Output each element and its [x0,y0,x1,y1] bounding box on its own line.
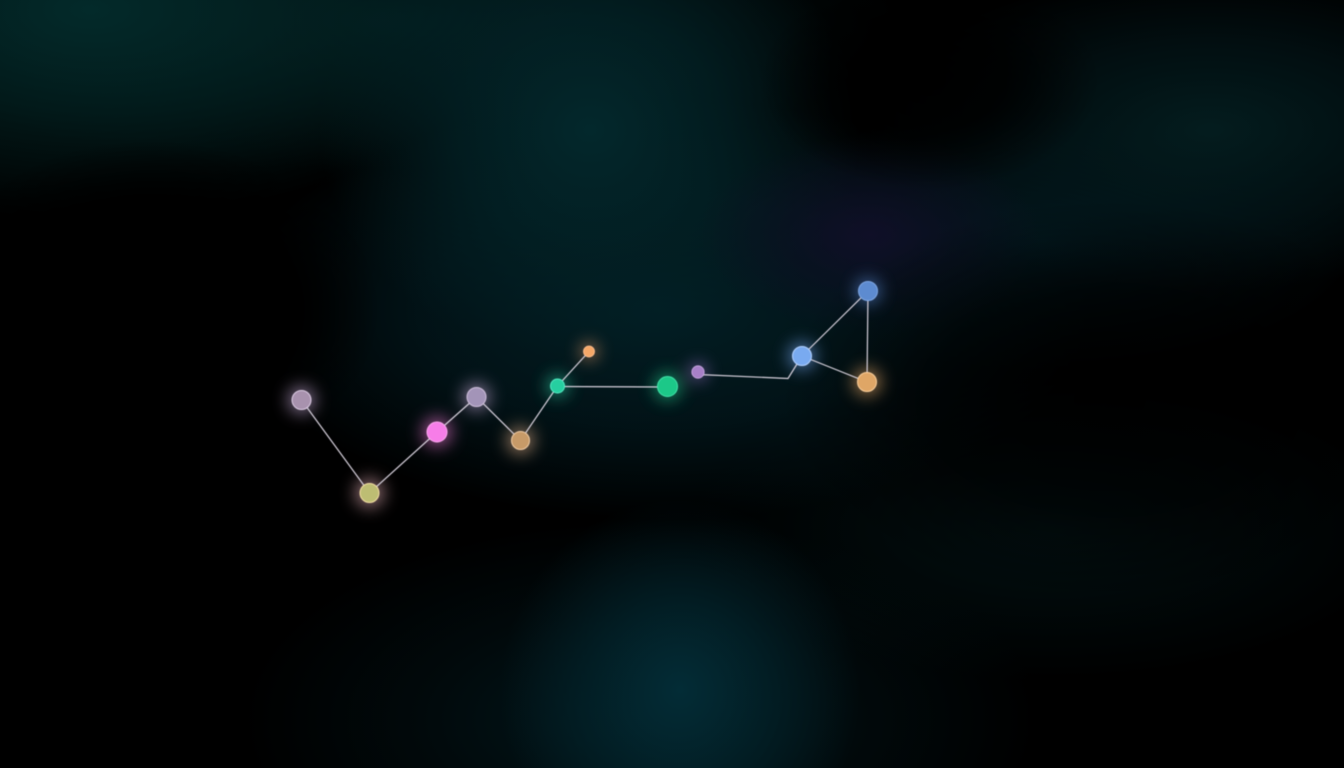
node: tan [512,432,530,450]
node: small teal [550,379,564,393]
node: blue [858,282,878,300]
node: small purple [692,366,704,378]
node: lilac start [292,390,311,410]
node: magenta [427,422,447,442]
node: orange [858,372,876,392]
connecting lines [302,291,868,493]
node: yellow-green [360,484,379,502]
node: lavender [467,388,486,406]
nodes [292,282,878,502]
node: green [658,376,678,396]
node: small orange [584,346,594,357]
node: light blue [792,346,812,366]
node glows [288,278,881,508]
